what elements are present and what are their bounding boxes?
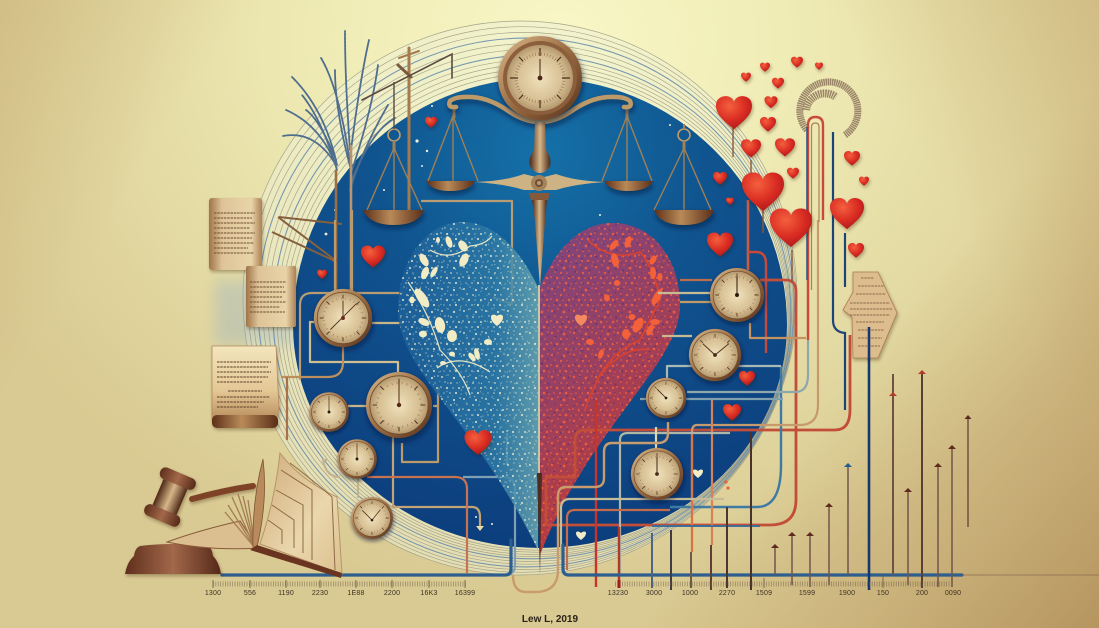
inner left pan [428,108,478,181]
hearts [317,57,869,455]
outer left pan [367,82,422,210]
tick labels: 1000 [682,590,698,597]
ring emblem [800,82,858,135]
center line [538,285,540,480]
gauge 4 [337,439,377,479]
left circuit pipes [281,201,515,575]
inner right pan [602,108,652,181]
scroll 1 [209,198,262,270]
tick labels: 13230 [608,590,628,597]
outer right pan [654,124,711,210]
gauge 6 [710,268,764,322]
gavel base [125,544,221,574]
tick labels: 150 [877,590,889,597]
tick labels: 16K3 [420,590,438,597]
tick labels: 1190 [278,590,294,597]
citation: Lew L, 2019 [522,614,579,625]
scroll 3 [212,346,279,428]
tick labels: 2200 [384,590,400,597]
tick labels: 0090 [945,590,961,597]
left leaves [408,235,503,395]
tick labels: 2230 [312,590,328,597]
tick labels: 2270 [719,590,735,597]
blue circle [293,78,787,548]
torn document [843,272,897,358]
curved beam [449,97,631,122]
heart halves [390,215,689,560]
tick labels: 3000 [646,590,662,597]
top gauge [498,36,582,120]
column [475,122,605,575]
gauge 1 [314,289,372,347]
tick labels: 1599 [799,590,815,597]
gauges [309,268,764,539]
right circuit pipes [513,200,850,592]
stars [325,105,671,525]
concentric line rings [215,21,797,575]
gauge 3 [309,392,349,432]
tick labels: 1509 [756,590,772,597]
arrow tip [476,526,484,531]
baseline [222,540,1099,575]
gauge 7 [689,329,741,381]
tick rule right [615,575,950,588]
left heart [398,222,538,550]
tick labels: 1300 [205,590,221,597]
balance scale [363,36,714,575]
thermometer pipe [733,117,845,410]
plant [283,31,395,190]
right heart [540,223,680,554]
red sparks [724,480,730,490]
open book [167,453,342,578]
signal post [362,48,452,212]
tick labels: 1E88 [347,590,365,597]
vertical lines [652,327,968,590]
pans [363,181,714,225]
gauge 2 [366,372,432,438]
tick labels: 556 [244,590,256,597]
small cream hearts [576,470,703,540]
plant stems [336,145,351,300]
document pipe [868,327,870,360]
drafting compass [272,217,342,262]
tick labels: 200 [916,590,928,597]
gauge 8 [646,378,686,418]
tick labels: 1900 [839,590,855,597]
gauge 9 [631,448,683,500]
scroll 2 [246,266,296,327]
tick rule left [213,580,467,588]
tick labels [205,590,961,597]
arrows [771,370,972,587]
tick labels: 16399 [455,590,475,597]
right leaves [575,235,665,410]
gauge 5 [351,497,393,539]
gavel [142,466,253,528]
